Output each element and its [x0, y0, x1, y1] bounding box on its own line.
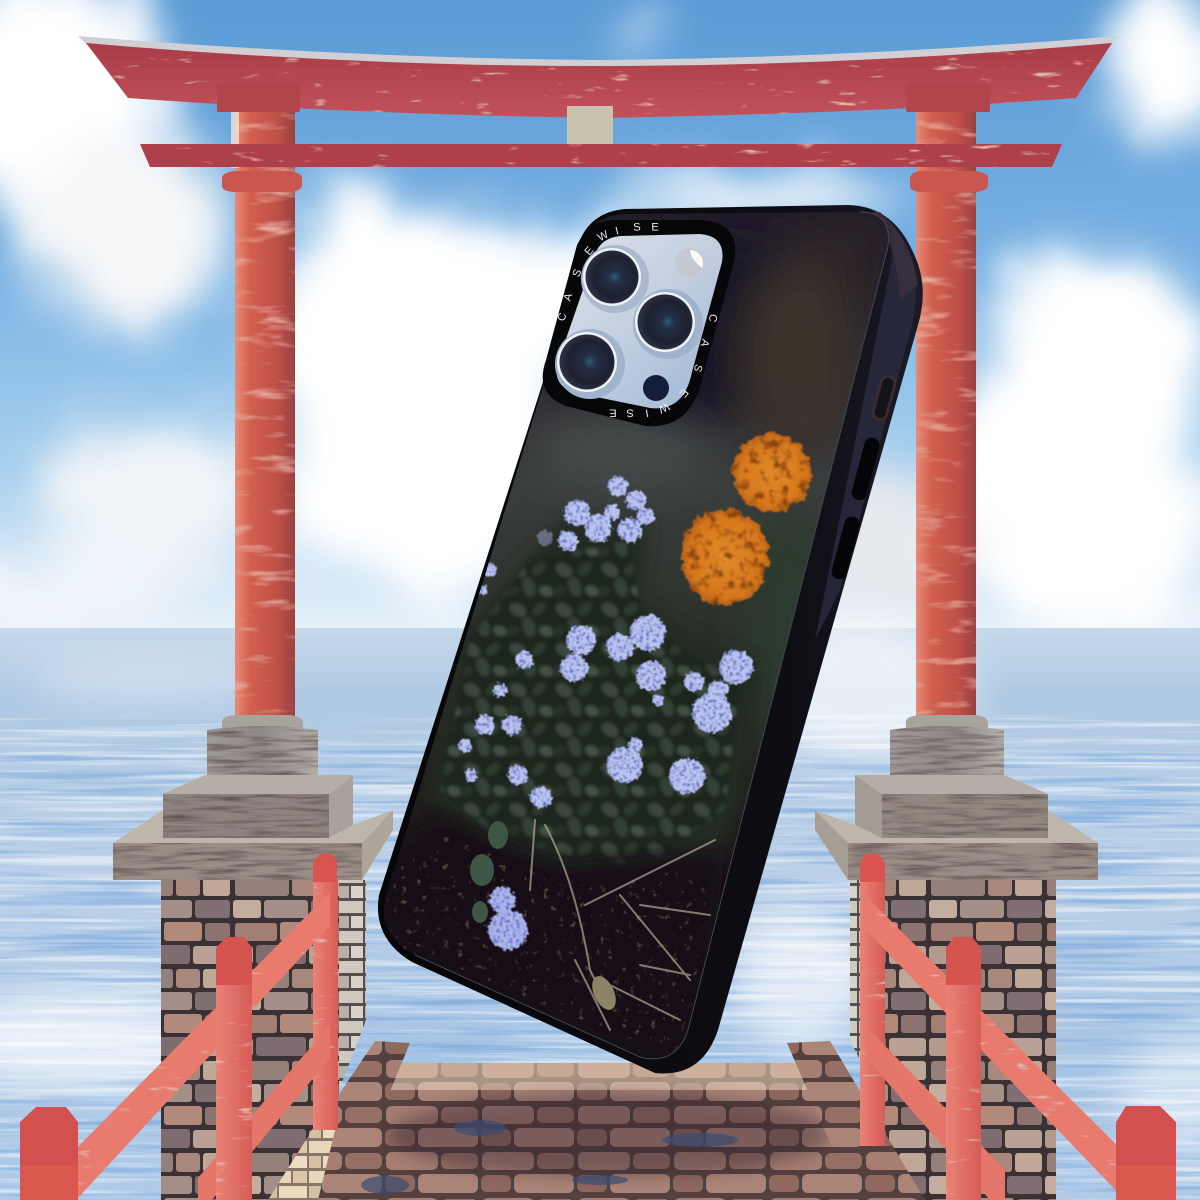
- brand text right arc: S: [626, 406, 634, 419]
- soil speckle: [385, 835, 710, 1060]
- right mid block side: [855, 775, 882, 838]
- dark soil: [392, 812, 726, 908]
- right stone base: [815, 715, 1098, 1200]
- right brick column side: [850, 880, 860, 1060]
- dark out-of-focus shapes: [538, 228, 863, 744]
- top beam: [86, 43, 1112, 118]
- puddles: [361, 1120, 738, 1194]
- left upper rail: [60, 892, 330, 1200]
- dry stems: [530, 820, 715, 1030]
- left base top: [113, 810, 393, 843]
- main lens: [633, 289, 703, 359]
- left beam cap: [217, 84, 300, 112]
- brand text left arc: C: [556, 311, 569, 323]
- right base front: [848, 843, 1098, 880]
- camera island: [543, 220, 735, 426]
- top beam pale roof edge: [78, 36, 1118, 68]
- right base side: [815, 810, 848, 880]
- top side sheen: [872, 212, 918, 300]
- left front post: [20, 1107, 78, 1200]
- phone shadow on floor: [390, 1093, 830, 1177]
- brand text right arc: I: [644, 406, 649, 419]
- wide lens: [581, 245, 649, 313]
- sea: [0, 620, 1200, 1200]
- face edge highlight: [415, 212, 888, 1059]
- sunlit stones: [388, 1063, 810, 1090]
- sky background: [0, 0, 1200, 630]
- left base side: [362, 810, 393, 880]
- telephoto lens: [555, 329, 625, 399]
- walkway floor: [338, 1063, 862, 1200]
- left rear post: [313, 854, 338, 1130]
- brand text left arc: E: [651, 222, 659, 234]
- lidar sensor: [643, 375, 669, 401]
- left mid block top: [163, 775, 353, 794]
- right brick column: [860, 880, 1056, 1200]
- brand text right arc: C: [706, 312, 719, 323]
- brand text right arc: [609, 312, 719, 419]
- clouds: [0, 0, 1200, 635]
- right front post: [1116, 1106, 1176, 1200]
- phone with case: [370, 205, 923, 1075]
- brand text left arc: A: [562, 291, 575, 303]
- printed photo on case back: [370, 205, 900, 1075]
- right base top: [815, 810, 1098, 843]
- left brick column side: [339, 880, 366, 1090]
- left lower rail: [198, 1025, 330, 1200]
- stone walkway: [268, 1041, 925, 1200]
- left plinth collar: [222, 715, 303, 730]
- brand text right arc: E: [677, 386, 691, 399]
- brand text right arc: A: [698, 338, 711, 349]
- lower beam: [140, 144, 1062, 167]
- brand text left arc: W: [596, 228, 611, 244]
- camera plateau: [557, 234, 723, 408]
- orange marigolds: [681, 434, 812, 605]
- left stone base: [113, 715, 393, 1200]
- left curb sunlit edge: [268, 1118, 338, 1200]
- right rear post: [860, 854, 885, 1146]
- left curb: [268, 1041, 410, 1200]
- left base front: [113, 843, 362, 880]
- right curb: [787, 1041, 925, 1200]
- brand text right arc: E: [609, 406, 617, 418]
- left railing: [20, 854, 338, 1200]
- right beam cap: [906, 84, 990, 112]
- right railing: [860, 854, 1176, 1200]
- right middle post: [946, 937, 981, 1200]
- foliage mass: [430, 520, 760, 900]
- left pillar: [222, 100, 302, 720]
- right plinth collar: [906, 715, 988, 730]
- brand text right arc: S: [691, 362, 704, 373]
- left brick column: [161, 880, 339, 1200]
- case body: [378, 205, 923, 1073]
- flash: [675, 248, 705, 278]
- brand text left arc: [556, 221, 659, 323]
- left middle post: [216, 937, 252, 1200]
- right mid block front: [882, 794, 1048, 838]
- volume and action buttons: [830, 375, 896, 581]
- torii gate: [78, 36, 1118, 720]
- lavender ageratum flowers: [458, 476, 753, 808]
- left mid block front: [163, 794, 329, 838]
- centre support block: [567, 106, 613, 144]
- brand text left arc: S: [633, 221, 641, 234]
- side highlight: [815, 226, 916, 640]
- brand text left arc: E: [582, 245, 596, 258]
- right upper rail: [866, 896, 1142, 1200]
- right lower rail: [866, 1026, 1005, 1200]
- brand text left arc: I: [614, 225, 620, 238]
- right plinth: [890, 726, 1004, 789]
- brand text right arc: W: [656, 400, 671, 415]
- seed head: [592, 976, 616, 1010]
- left plinth: [207, 726, 318, 789]
- right mid block top: [855, 775, 1048, 794]
- brand text left arc: S: [570, 268, 584, 279]
- camera ring: [543, 220, 735, 426]
- right pillar: [910, 100, 988, 720]
- left mid block side: [329, 775, 353, 838]
- bottom blue flowers: [488, 887, 528, 950]
- small leaves near bottom flowers: [470, 821, 508, 923]
